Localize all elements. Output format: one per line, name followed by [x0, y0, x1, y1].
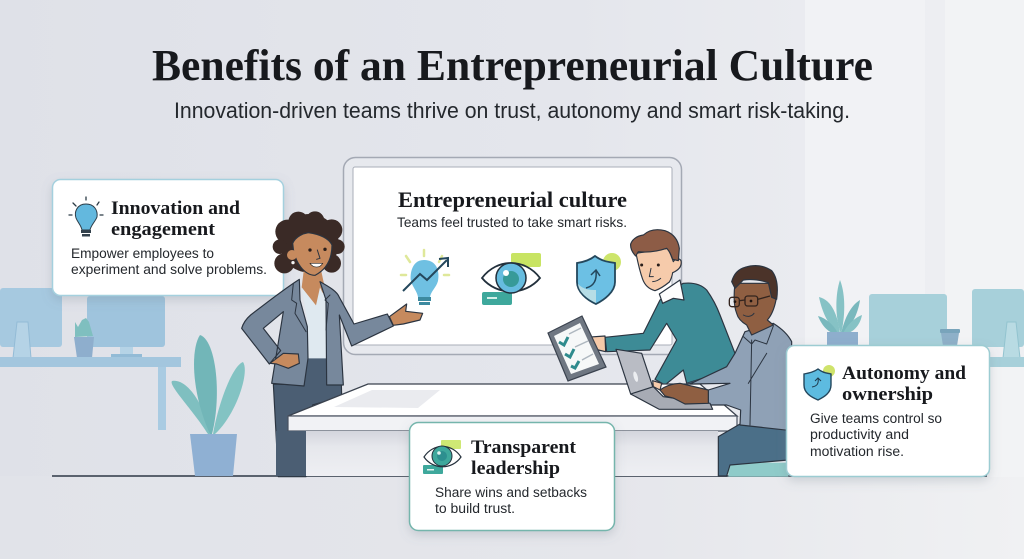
icon: eye with chips: [482, 253, 541, 305]
board subtitle: Teams feel trusted to take smart risks.: [397, 214, 627, 230]
shirt: [690, 323, 792, 431]
stool: [728, 463, 788, 477]
card body: to build trust.: [435, 501, 515, 516]
callout: autonomy and ownership: [786, 346, 990, 476]
laptop lid: [616, 349, 659, 407]
icon: bulb with growth arrow: [401, 250, 449, 305]
seated man with laptop: [616, 266, 792, 477]
card body: [435, 485, 587, 516]
hands: [653, 381, 662, 390]
lapels: [292, 283, 330, 332]
hair: [631, 230, 679, 261]
floor line: [52, 475, 987, 477]
woman presenting: [242, 211, 423, 477]
hair: [273, 211, 345, 273]
hair: [732, 266, 777, 299]
blazer body and left arm: [242, 279, 308, 386]
card body: productivity and: [810, 427, 909, 442]
card heading: [111, 199, 241, 240]
potted plant: [172, 335, 245, 476]
woman's trousers lower leg: [276, 431, 306, 476]
trousers: [718, 424, 788, 476]
card heading: [471, 438, 577, 479]
card body: [71, 246, 267, 277]
card body: Empower employees to: [71, 246, 214, 261]
laptop base: [631, 387, 713, 409]
card body: experiment and solve problems.: [71, 262, 267, 277]
man with tablet: [586, 230, 735, 385]
card heading: Innovation and: [111, 199, 241, 219]
collar: [659, 280, 684, 303]
board heading: Entrepreneurial culture: [398, 187, 627, 212]
trousers: [273, 357, 342, 477]
icon: shield: [804, 365, 835, 400]
card body: [810, 411, 942, 459]
card body: Share wins and setbacks: [435, 485, 587, 500]
head: [636, 248, 681, 291]
icon: eye: [423, 440, 461, 474]
head: [734, 283, 776, 335]
neck: [302, 268, 325, 306]
card heading: Transparent: [471, 438, 577, 458]
page subtitle: Innovation-driven teams thrive on trust, autonomy and smart risk-taking.: [174, 98, 850, 123]
table: [288, 384, 737, 476]
callout: innovation and engagement: [52, 180, 284, 296]
card body: motivation rise.: [810, 444, 904, 459]
card heading: engagement: [111, 220, 216, 240]
icon: light bulb: [69, 197, 103, 236]
face: [293, 233, 332, 275]
card heading: [842, 364, 967, 405]
left background desk with monitors: [0, 288, 181, 430]
sweater: [605, 283, 735, 385]
card heading: leadership: [471, 459, 560, 479]
blazer right side and arm: [320, 282, 393, 385]
right background desk with monitors, plant and cup: [818, 280, 1024, 367]
blouse: [302, 287, 326, 358]
card body: Give teams control so: [810, 411, 942, 426]
hand on tablet: [586, 336, 606, 352]
hands: [389, 304, 423, 325]
card heading: Autonomy and: [842, 364, 967, 384]
page title: Benefits of an Entrepreneurial Culture: [152, 41, 873, 90]
glasses: [729, 296, 770, 307]
tablet: [548, 316, 606, 381]
callout: transparent leadership: [410, 422, 614, 530]
presentation board: [344, 158, 682, 354]
card heading: ownership: [842, 385, 933, 405]
icon: shield with arrow: [577, 253, 621, 304]
